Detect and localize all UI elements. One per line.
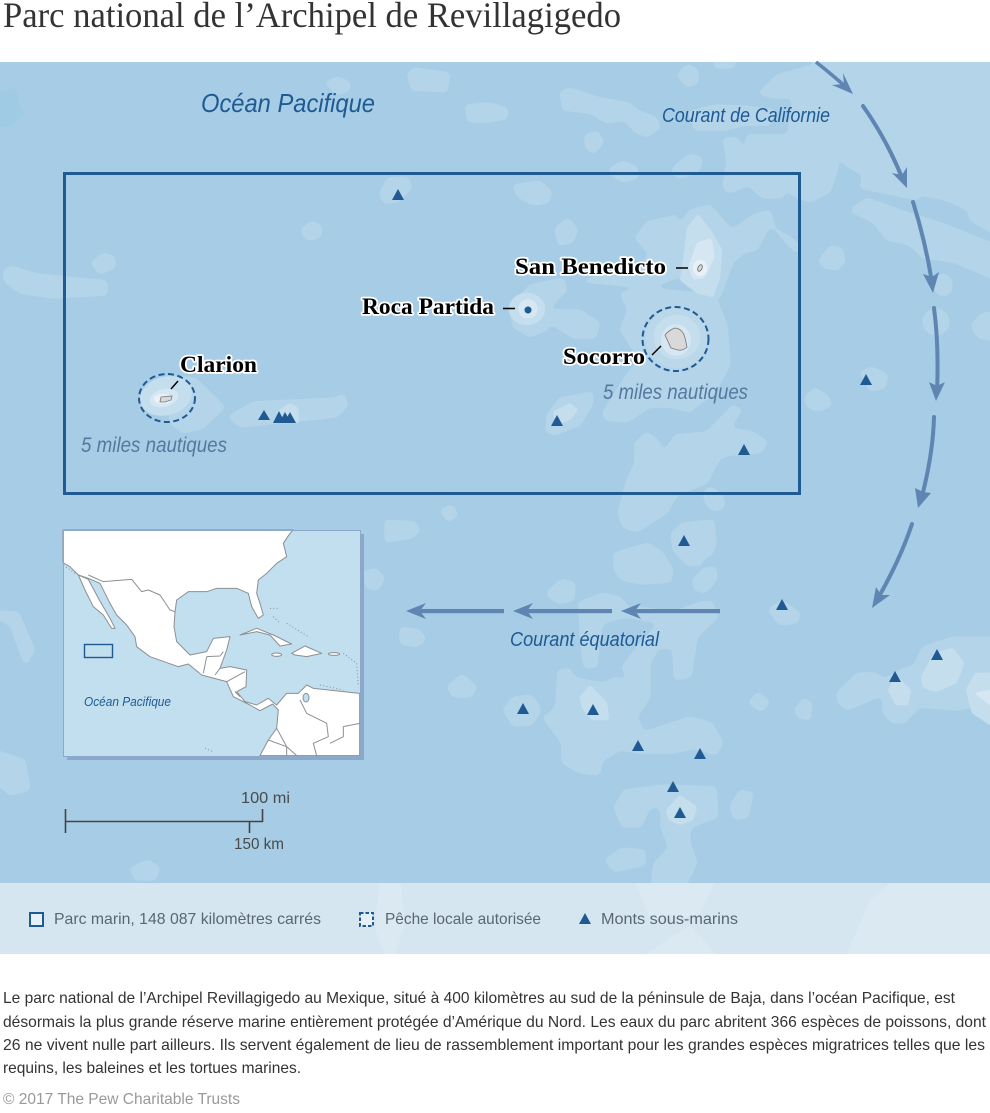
scale bar bbox=[65, 790, 290, 853]
scale bar: 150 km bbox=[234, 836, 284, 853]
panel: locator inset map bbox=[63, 530, 364, 760]
panel: legend: Monts sous-marins bbox=[601, 911, 738, 928]
description text: désormais la plus grande réserve marine entièrement protégée d’Amérique du Nord. Les eaux du parc abritent 366 espèces de poissons, dont bbox=[3, 1014, 987, 1031]
Roca Partida island: Roca Partida bbox=[362, 294, 495, 319]
Socorro 5 mile label: 5 miles nautiques bbox=[603, 381, 748, 404]
panel: legend: Pêche locale autorisée bbox=[385, 911, 541, 928]
marine park boundary bbox=[64, 174, 800, 494]
seamount triangles bbox=[258, 189, 943, 818]
description text: requins, les baleines et les tortues marines. bbox=[3, 1060, 301, 1077]
Socorro island: Socorro bbox=[563, 344, 645, 369]
San Benedicto island: San Benedicto bbox=[515, 254, 666, 279]
California current label: Courant de Californie bbox=[662, 105, 830, 127]
Clarion island: Clarion bbox=[180, 352, 257, 377]
panel: locator inset map: Océan Pacifique bbox=[84, 694, 171, 709]
Clarion island bbox=[139, 352, 257, 422]
panel: ocean map background bbox=[0, 62, 990, 883]
Socorro island bbox=[563, 307, 708, 371]
panel: legend: Parc marin, 148 087 kilomètres carrés bbox=[54, 911, 321, 928]
description text bbox=[3, 990, 987, 1077]
equatorial current arrows bbox=[406, 603, 720, 619]
equatorial current label: Courant équatorial bbox=[510, 629, 659, 651]
Clarion 5 mile label: 5 miles nautiques bbox=[81, 434, 227, 457]
scale bar: 100 mi bbox=[241, 790, 290, 807]
description text: Le parc national de l’Archipel Revillagigedo au Mexique, situé à 400 kilomètres au sud de la péninsule de Baja, dans l’océan Pacifique, est bbox=[3, 990, 956, 1007]
ocean label: Océan Pacifique bbox=[201, 88, 375, 118]
California current arrows bbox=[816, 62, 945, 608]
description text: 26 ne vivent nulle part ailleurs. Ils servent également de lieu de rassemblement important pour les grandes espèces migratrices telles que les bbox=[3, 1037, 985, 1054]
panel: legend bbox=[0, 870, 990, 970]
bathymetry shapes bbox=[0, 45, 990, 900]
copyright: © 2017 The Pew Charitable Trusts bbox=[3, 1091, 240, 1108]
